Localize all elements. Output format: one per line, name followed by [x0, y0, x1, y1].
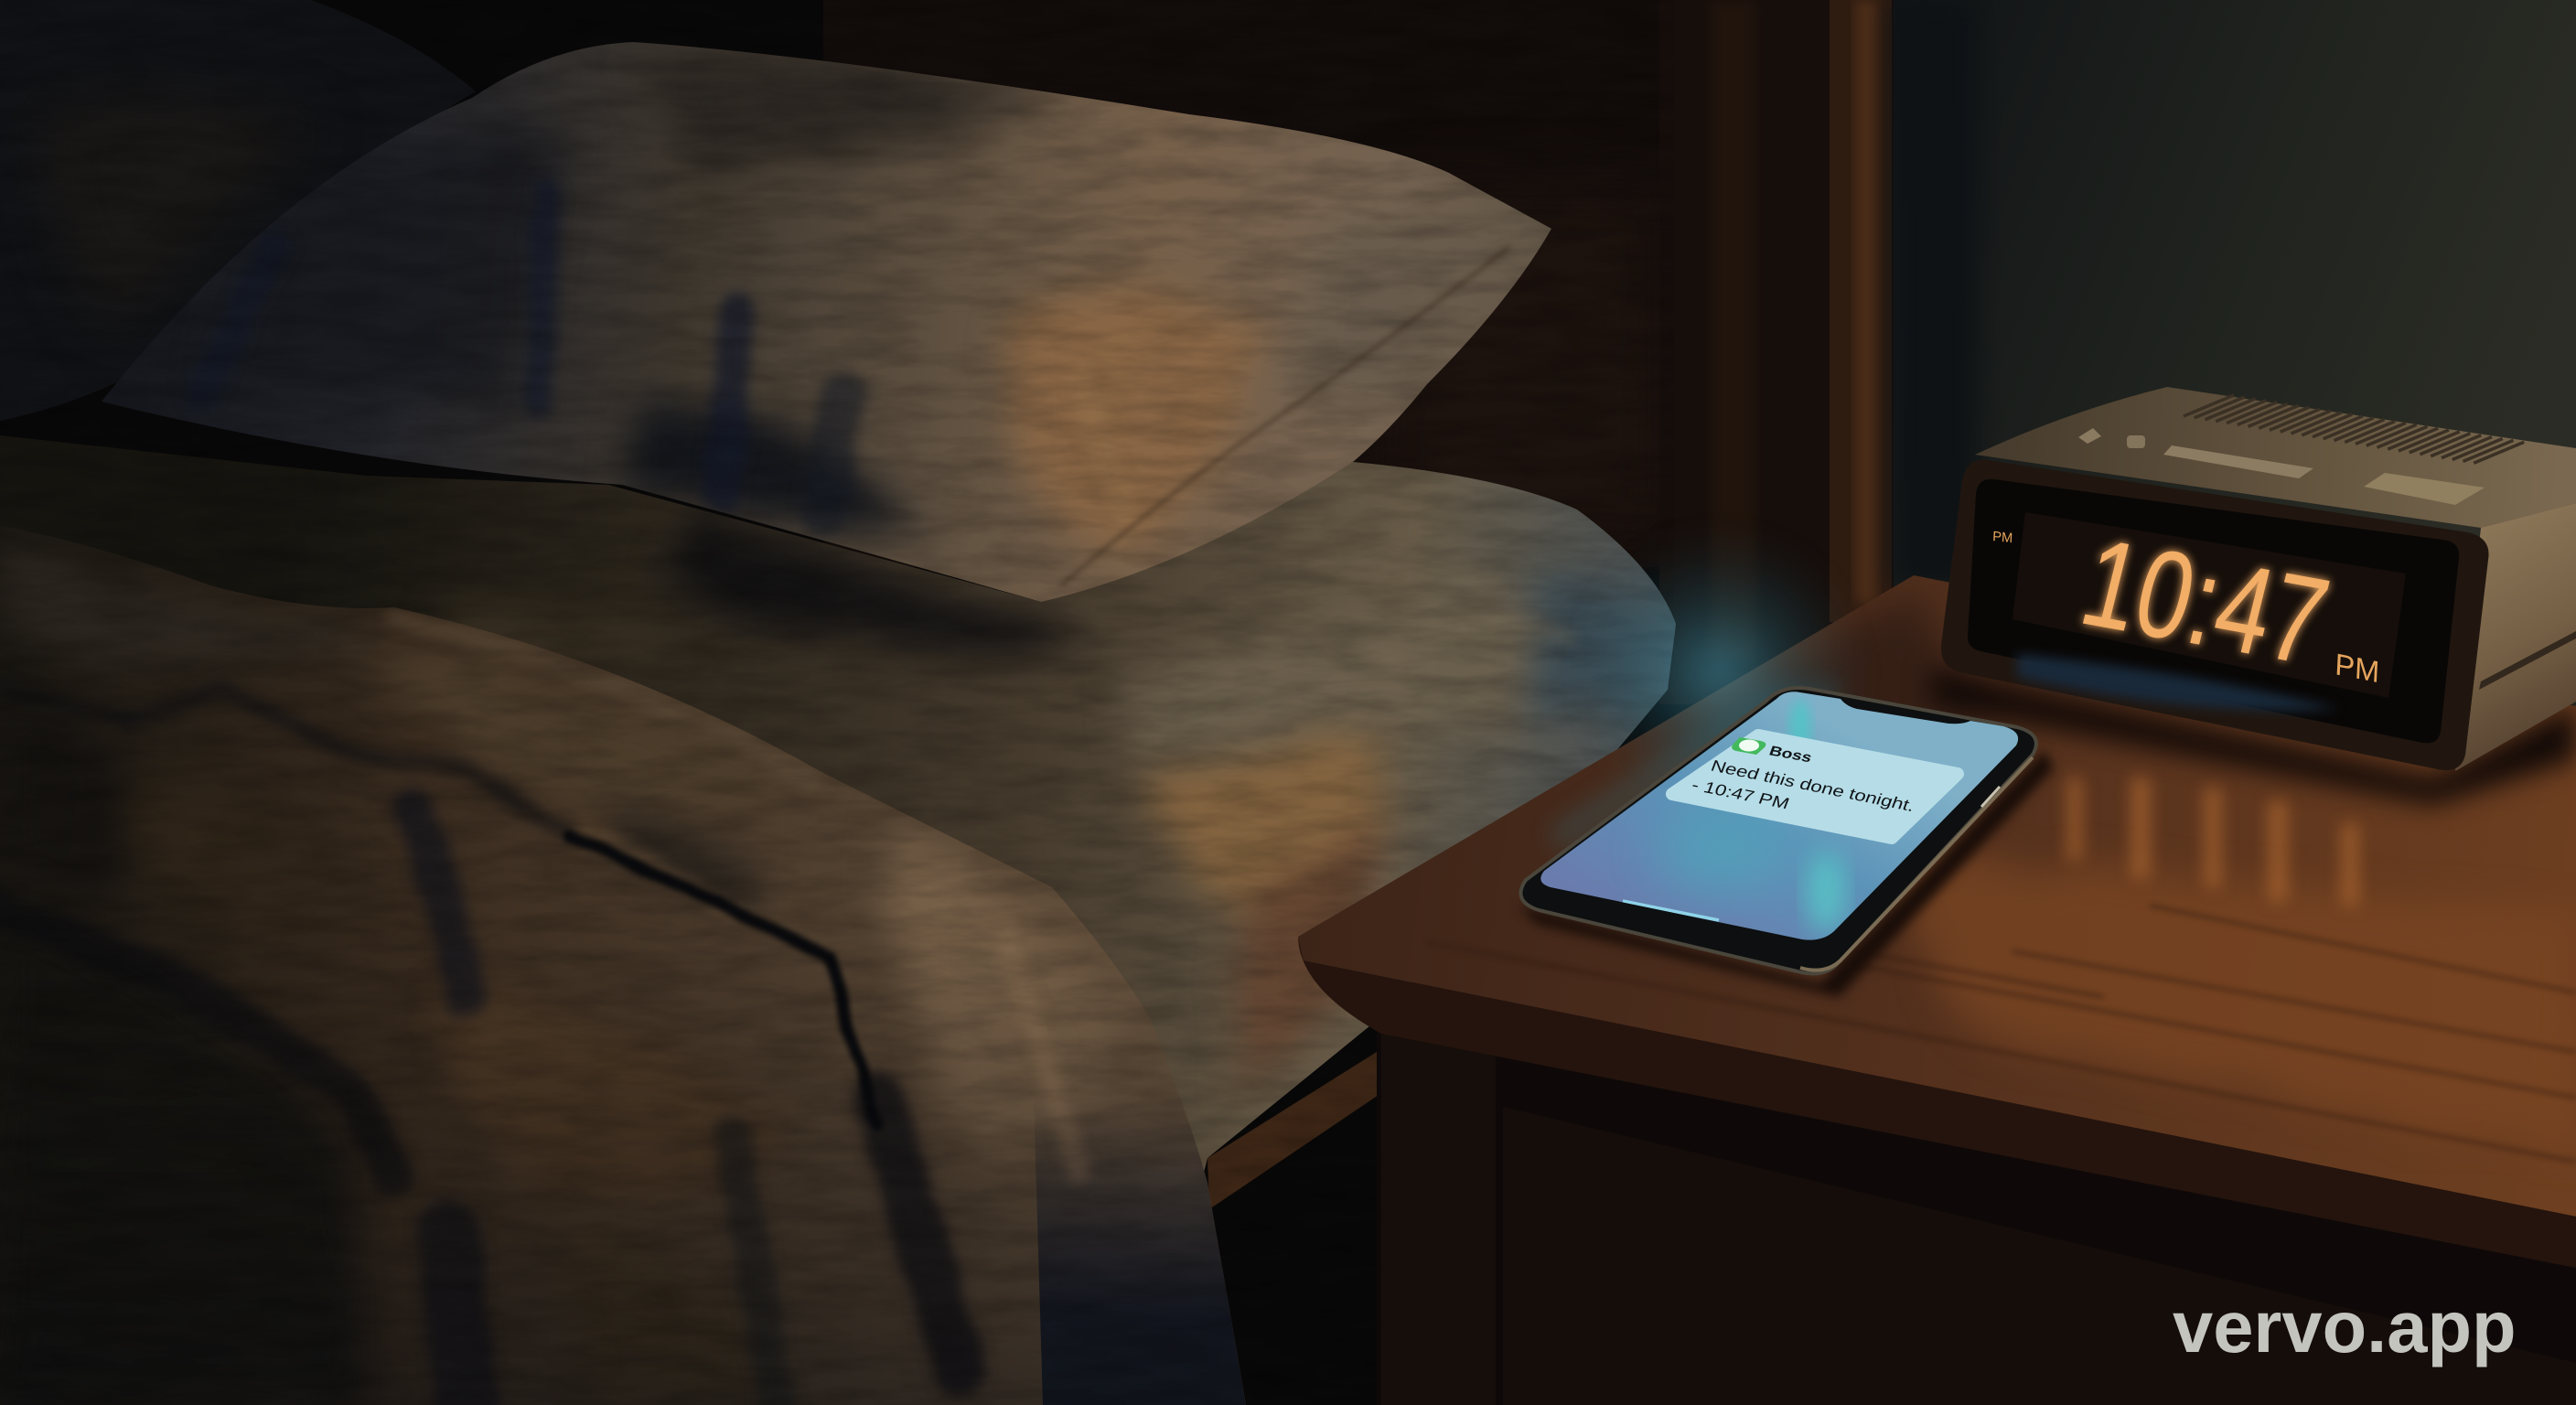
fitted sheet on mattress	[0, 435, 1676, 1171]
rumpled blanket	[0, 526, 1253, 1405]
phone body	[1520, 688, 2036, 973]
headboard	[823, 0, 1674, 567]
navy shaded drape	[1035, 1120, 1246, 1405]
table front edge	[1298, 937, 2576, 1268]
table top	[1298, 575, 2576, 1217]
blanket fold shadows	[0, 617, 1079, 1405]
notification text: - 10:47 PM	[1689, 777, 1792, 813]
phone side button	[1981, 787, 2000, 807]
notification text: Need this done tonight.	[1708, 757, 1917, 815]
speaker grille	[2184, 395, 2524, 463]
notification card	[1672, 735, 1958, 838]
bedpost	[1659, 0, 1897, 704]
phone bronze rim	[1800, 757, 2033, 971]
PM indicators: PM	[1992, 530, 2013, 546]
wall	[1894, 0, 2576, 732]
alarm clock	[1930, 387, 2576, 805]
nightstand body and drawer	[1377, 1024, 2576, 1405]
PM indicators: PM	[2334, 647, 2380, 689]
smartphone	[1519, 686, 2054, 997]
clock top face	[1975, 387, 2576, 528]
vervo.app watermark: vervo.app	[2173, 1286, 2517, 1367]
clock buttons	[2078, 428, 2485, 505]
clock light reflections on wood	[2067, 778, 2358, 906]
clock right side	[2455, 503, 2576, 771]
PM indicators	[1992, 530, 2380, 689]
clock shadow	[1930, 668, 2576, 805]
pillow seam	[1061, 247, 1509, 585]
painterly texture overlay	[0, 0, 1674, 1405]
wood grain	[1427, 896, 2576, 1162]
clock bezel	[1941, 460, 2489, 770]
phone shadow	[1519, 750, 2054, 997]
clock display glass	[1968, 479, 2459, 743]
bed	[0, 0, 1676, 1405]
main crease	[569, 835, 878, 1125]
front pillow	[102, 42, 1551, 602]
phone glow	[1546, 521, 1912, 842]
bed frame rail	[1208, 1052, 1381, 1209]
nightstand	[1298, 575, 2576, 1405]
phone screen	[1537, 686, 2031, 947]
notification text: Boss	[1767, 743, 1814, 766]
clock time digits: 10:47	[2069, 511, 2341, 692]
back pillow	[0, 0, 476, 421]
messages app icon	[1732, 737, 1766, 755]
